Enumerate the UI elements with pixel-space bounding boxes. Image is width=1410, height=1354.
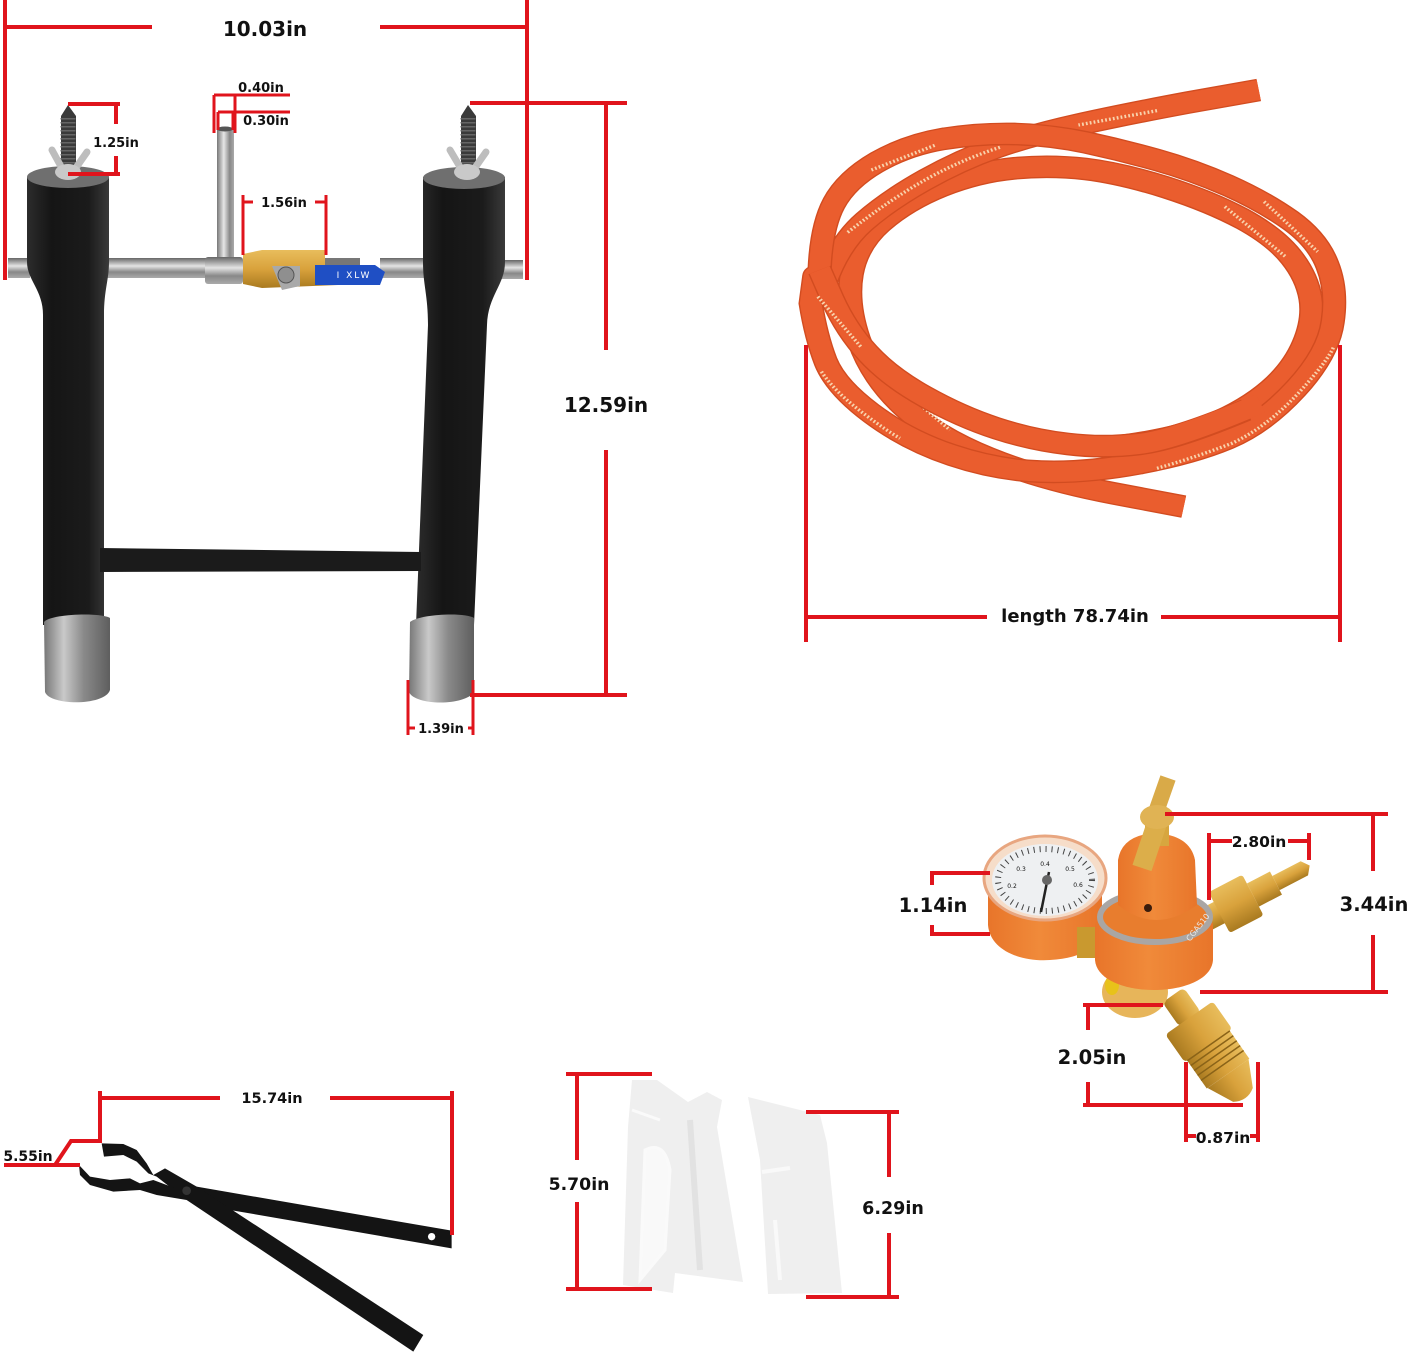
dimension: 0.87in	[1186, 1062, 1258, 1147]
dimension: 2.80in	[1209, 833, 1309, 900]
dimension: 0.30in tube inner	[218, 112, 290, 130]
dimension: 5.70in: 5.70in	[549, 1175, 609, 1195]
dimension: 10.03in width	[5, 0, 527, 280]
panel: burner frame	[5, 0, 648, 737]
dimension: 6.29in	[806, 1112, 924, 1297]
horizontal gas pipe	[8, 258, 523, 279]
dimension: 2.80in: 2.80in	[1232, 833, 1286, 851]
dimension: 3.44in	[1165, 814, 1408, 992]
dimension: 6.29in: 6.29in	[862, 1199, 924, 1219]
dimension: 1.56in valve	[243, 195, 326, 255]
bag 1	[623, 1080, 743, 1293]
dimension: length 78.74in: length 78.74in	[1001, 606, 1149, 627]
panel: plastic bags	[549, 1074, 924, 1297]
dimension: 1.39in foot	[408, 680, 473, 737]
pressure gauge: 0.3	[1016, 866, 1026, 873]
left burner tube	[27, 105, 110, 702]
brass T-handle	[1140, 778, 1174, 868]
dimension: 15.74in	[100, 1091, 452, 1235]
inlet fitting	[1149, 978, 1269, 1115]
ball valve	[243, 250, 385, 290]
dimension: length 78.74in	[806, 345, 1340, 642]
dimension: 12.59in height: 12.59in	[564, 393, 648, 417]
vertical inlet tube and tee	[205, 126, 243, 284]
dimension: 0.40in tube outer: 0.40in	[238, 81, 284, 96]
dimension: 2.05in: 2.05in	[1058, 1046, 1126, 1069]
dimension: 0.30in tube inner: 0.30in	[243, 114, 289, 129]
pressure gauge	[984, 836, 1106, 960]
dimension: 0.40in tube outer	[214, 81, 290, 133]
dimension: 0.87in: 0.87in	[1196, 1129, 1250, 1147]
tongs	[79, 1143, 452, 1352]
dimension: 5.55in: 5.55in	[3, 1149, 53, 1165]
pressure gauge: 0.2	[1007, 883, 1017, 890]
outlet fitting	[1194, 845, 1320, 940]
dimension: 2.05in	[1058, 1005, 1243, 1105]
ball valve: I XLW	[337, 271, 371, 281]
dimension: 1.39in foot: 1.39in	[418, 722, 464, 737]
dimension: 5.55in	[3, 1141, 100, 1165]
dimension: 1.14in	[899, 873, 990, 934]
pressure gauge: 0.4	[1040, 861, 1050, 868]
dimension: 1.25in screw: 1.25in	[93, 136, 139, 151]
dimension: 3.44in: 3.44in	[1340, 893, 1408, 916]
dimension: 10.03in width: 10.03in	[223, 17, 307, 41]
pressure gauge: 0.5	[1065, 866, 1075, 873]
regulator body	[1095, 833, 1213, 1018]
dimension: 15.74in: 15.74in	[241, 1091, 303, 1107]
dimension: 5.70in	[549, 1074, 652, 1289]
panel: gas regulator	[899, 778, 1408, 1147]
panel: orange hose	[806, 90, 1340, 642]
right burner tube	[409, 105, 505, 702]
hose coil	[811, 90, 1334, 507]
dimension: 12.59in height	[470, 103, 648, 695]
panel: forge tongs	[3, 1091, 452, 1352]
dimension: 1.56in valve: 1.56in	[261, 196, 307, 211]
dimension: 1.25in screw	[68, 104, 139, 174]
regulator body: CGA510	[1184, 912, 1212, 943]
dimension: 1.14in: 1.14in	[899, 894, 967, 917]
bag 2	[748, 1097, 842, 1294]
crossbar	[100, 548, 421, 572]
pressure gauge: 0.6	[1073, 882, 1083, 889]
